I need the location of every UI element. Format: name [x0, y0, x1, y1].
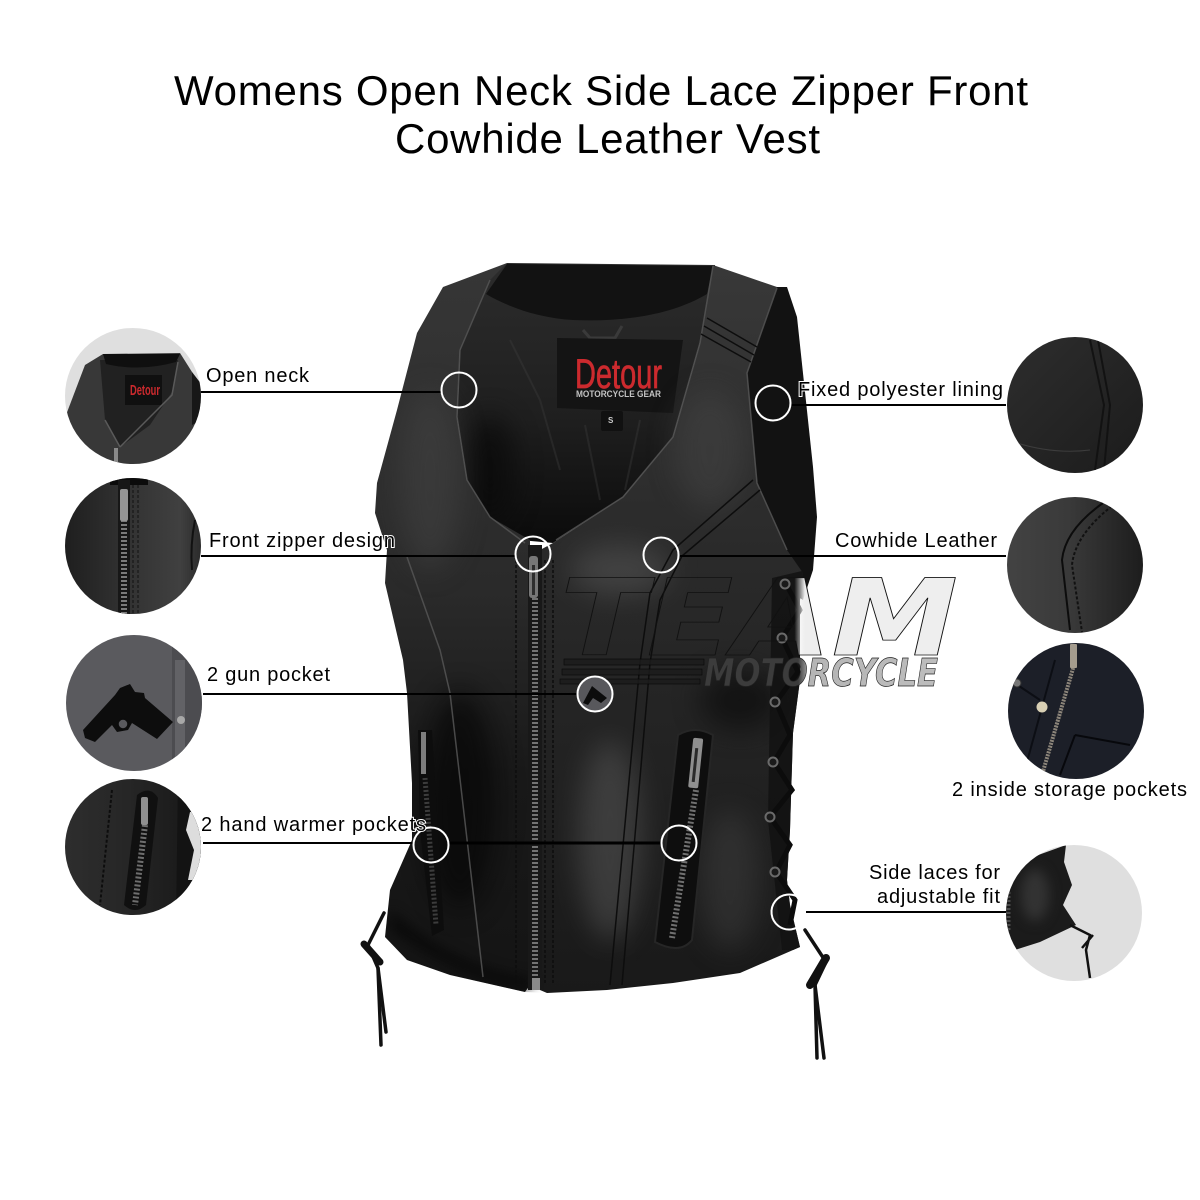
label: 2 gun pocket: 2 gun pocket	[207, 664, 330, 686]
hotspot markers	[414, 372, 803, 930]
left hand warmer pocket	[418, 730, 444, 936]
inset: open neck: Detour	[130, 382, 160, 399]
label: side laces for adjustable fit: Side laces for	[869, 862, 1000, 884]
right hand warmer pocket	[655, 730, 713, 948]
inset: inside storage pockets	[1005, 640, 1145, 782]
leather highlights and shadows	[390, 390, 806, 990]
seams and stitching	[407, 266, 787, 977]
left lace cord	[364, 913, 386, 1045]
product photo: leather vest	[364, 263, 826, 1058]
icon: pistol	[83, 684, 173, 742]
watermark: TEAM MOTORCYCLE: MOTORCYCLE	[704, 651, 938, 695]
inset: cowhide leather	[1005, 495, 1145, 635]
inset: front zipper	[65, 478, 201, 614]
label: front zipper design: Front zipper design	[209, 530, 395, 552]
label: cowhide leather: Cowhide Leather	[835, 530, 997, 552]
hanger loop	[583, 326, 622, 338]
brand label: S	[608, 416, 614, 425]
gun pocket marker	[578, 676, 612, 712]
brand label: MOTORCYCLE GEAR	[576, 389, 661, 399]
side lacing	[766, 580, 800, 925]
label: open neck: Open neck	[206, 365, 310, 387]
label: 2 hand warmer pockets: 2 hand warmer pockets	[201, 814, 426, 836]
black collar band	[486, 264, 713, 320]
label: fixed polyester lining: Fixed polyester lining	[798, 379, 1003, 401]
neck interior lining	[457, 263, 715, 543]
inset: hand warmer pocket	[65, 779, 201, 915]
lining shadow	[466, 415, 514, 525]
label: side laces for adjustable fit: adjustable fit	[877, 886, 1000, 908]
leader lines	[200, 392, 1006, 912]
inset: polyester lining	[1005, 335, 1145, 475]
title	[174, 67, 1028, 162]
watermark: TEAM MOTORCYCLE: TEAM	[560, 557, 958, 680]
title: Cowhide Leather Vest	[395, 115, 820, 162]
brand label: Detour	[575, 350, 662, 397]
vest back lining seen through armhole	[740, 287, 817, 600]
left vest panel	[375, 263, 530, 992]
dark lacing strip	[768, 570, 806, 950]
label: side laces for adjustable fit	[869, 862, 1000, 908]
label: 2 inside storage pockets: 2 inside storage pockets	[952, 779, 1187, 801]
title: Womens Open Neck Side Lace Zipper Front	[174, 67, 1028, 114]
inset: gun pocket	[66, 635, 202, 771]
brand label	[557, 338, 683, 431]
right vest panel	[540, 265, 803, 993]
inset: open neck	[65, 328, 201, 464]
inset: side laces	[1000, 843, 1145, 983]
right lace cord	[805, 930, 826, 1058]
lining folds	[510, 340, 640, 500]
front zipper	[528, 545, 542, 990]
